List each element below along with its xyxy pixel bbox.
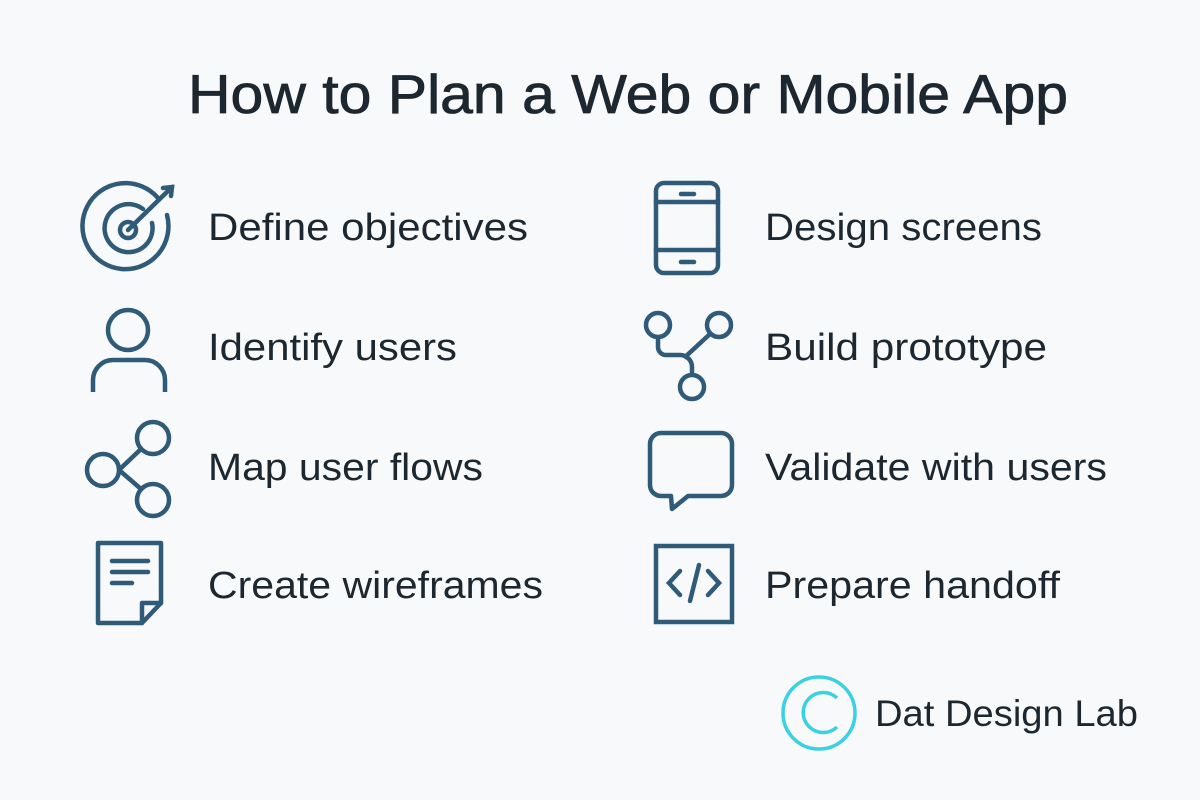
icon: user: [93, 310, 165, 392]
icon: phone: [656, 183, 718, 273]
title: How to Plan a Web or Mobile App: [188, 63, 1068, 125]
step list: right column: [646, 183, 1107, 622]
icon: logo circle: [783, 677, 855, 749]
icon: target: [82, 183, 172, 269]
text: prepare handoff: Prepare handoff: [765, 565, 1060, 607]
icon: branch: [646, 313, 731, 399]
step list: left column: [82, 183, 543, 623]
icon: share: [87, 422, 169, 516]
logo: [783, 677, 1138, 749]
icon: code: [656, 546, 732, 622]
text: build prototype: Build prototype: [765, 327, 1047, 369]
text: validate with users: Validate with users: [765, 447, 1107, 489]
text: design screens: Design screens: [765, 207, 1042, 249]
text: create wireframes: Create wireframes: [208, 565, 543, 607]
text: identify users: Identify users: [208, 327, 457, 369]
icon: document: [98, 543, 161, 623]
text: map user flows: Map user flows: [208, 447, 483, 489]
icon: speech bubble: [650, 433, 732, 509]
text: define objectives: Define objectives: [208, 207, 528, 249]
text: brand name: Dat Design Lab: [875, 693, 1138, 734]
